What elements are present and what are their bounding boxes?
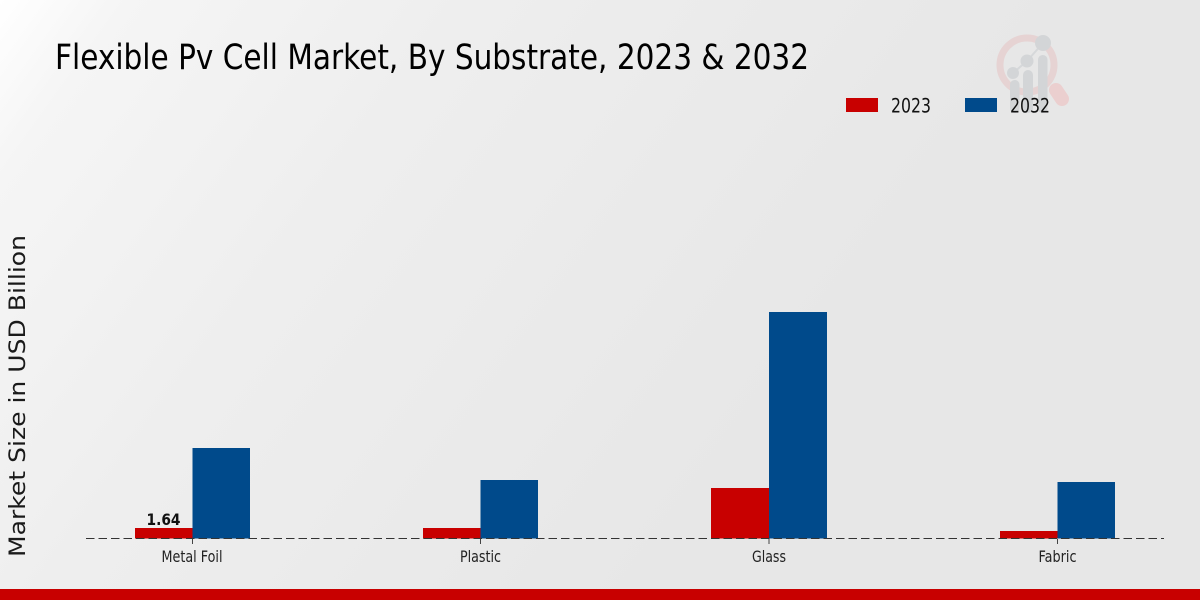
category labels: Fabric [1038,547,1076,566]
category labels: Plastic [460,547,501,566]
icon: watermark logo [1000,35,1062,113]
title: Flexible Pv Cell Market, By Substrate, 2023 & 2032 [55,38,809,78]
legend item: 2023 [846,94,931,118]
bars: Plastic [423,480,538,538]
legend item: 2032 [965,94,1050,118]
category labels: Metal Foil [162,547,222,566]
tick marks [192,539,1058,544]
legend [846,94,1050,118]
y-axis label: Market Size in USD Billion [5,235,31,557]
bars: Glass [711,312,827,538]
category labels [162,547,1076,566]
footer bar [0,589,1200,600]
legend item: 2032: 2032 [1010,94,1050,118]
bars: Metal Foil [135,448,250,538]
legend item: 2023: 2023 [891,94,931,118]
category labels: Glass [752,547,786,566]
data label: 1.64 [146,510,180,529]
bars: Fabric [1000,482,1115,538]
x-axis baseline [86,538,1164,540]
bar chart [86,312,1164,566]
